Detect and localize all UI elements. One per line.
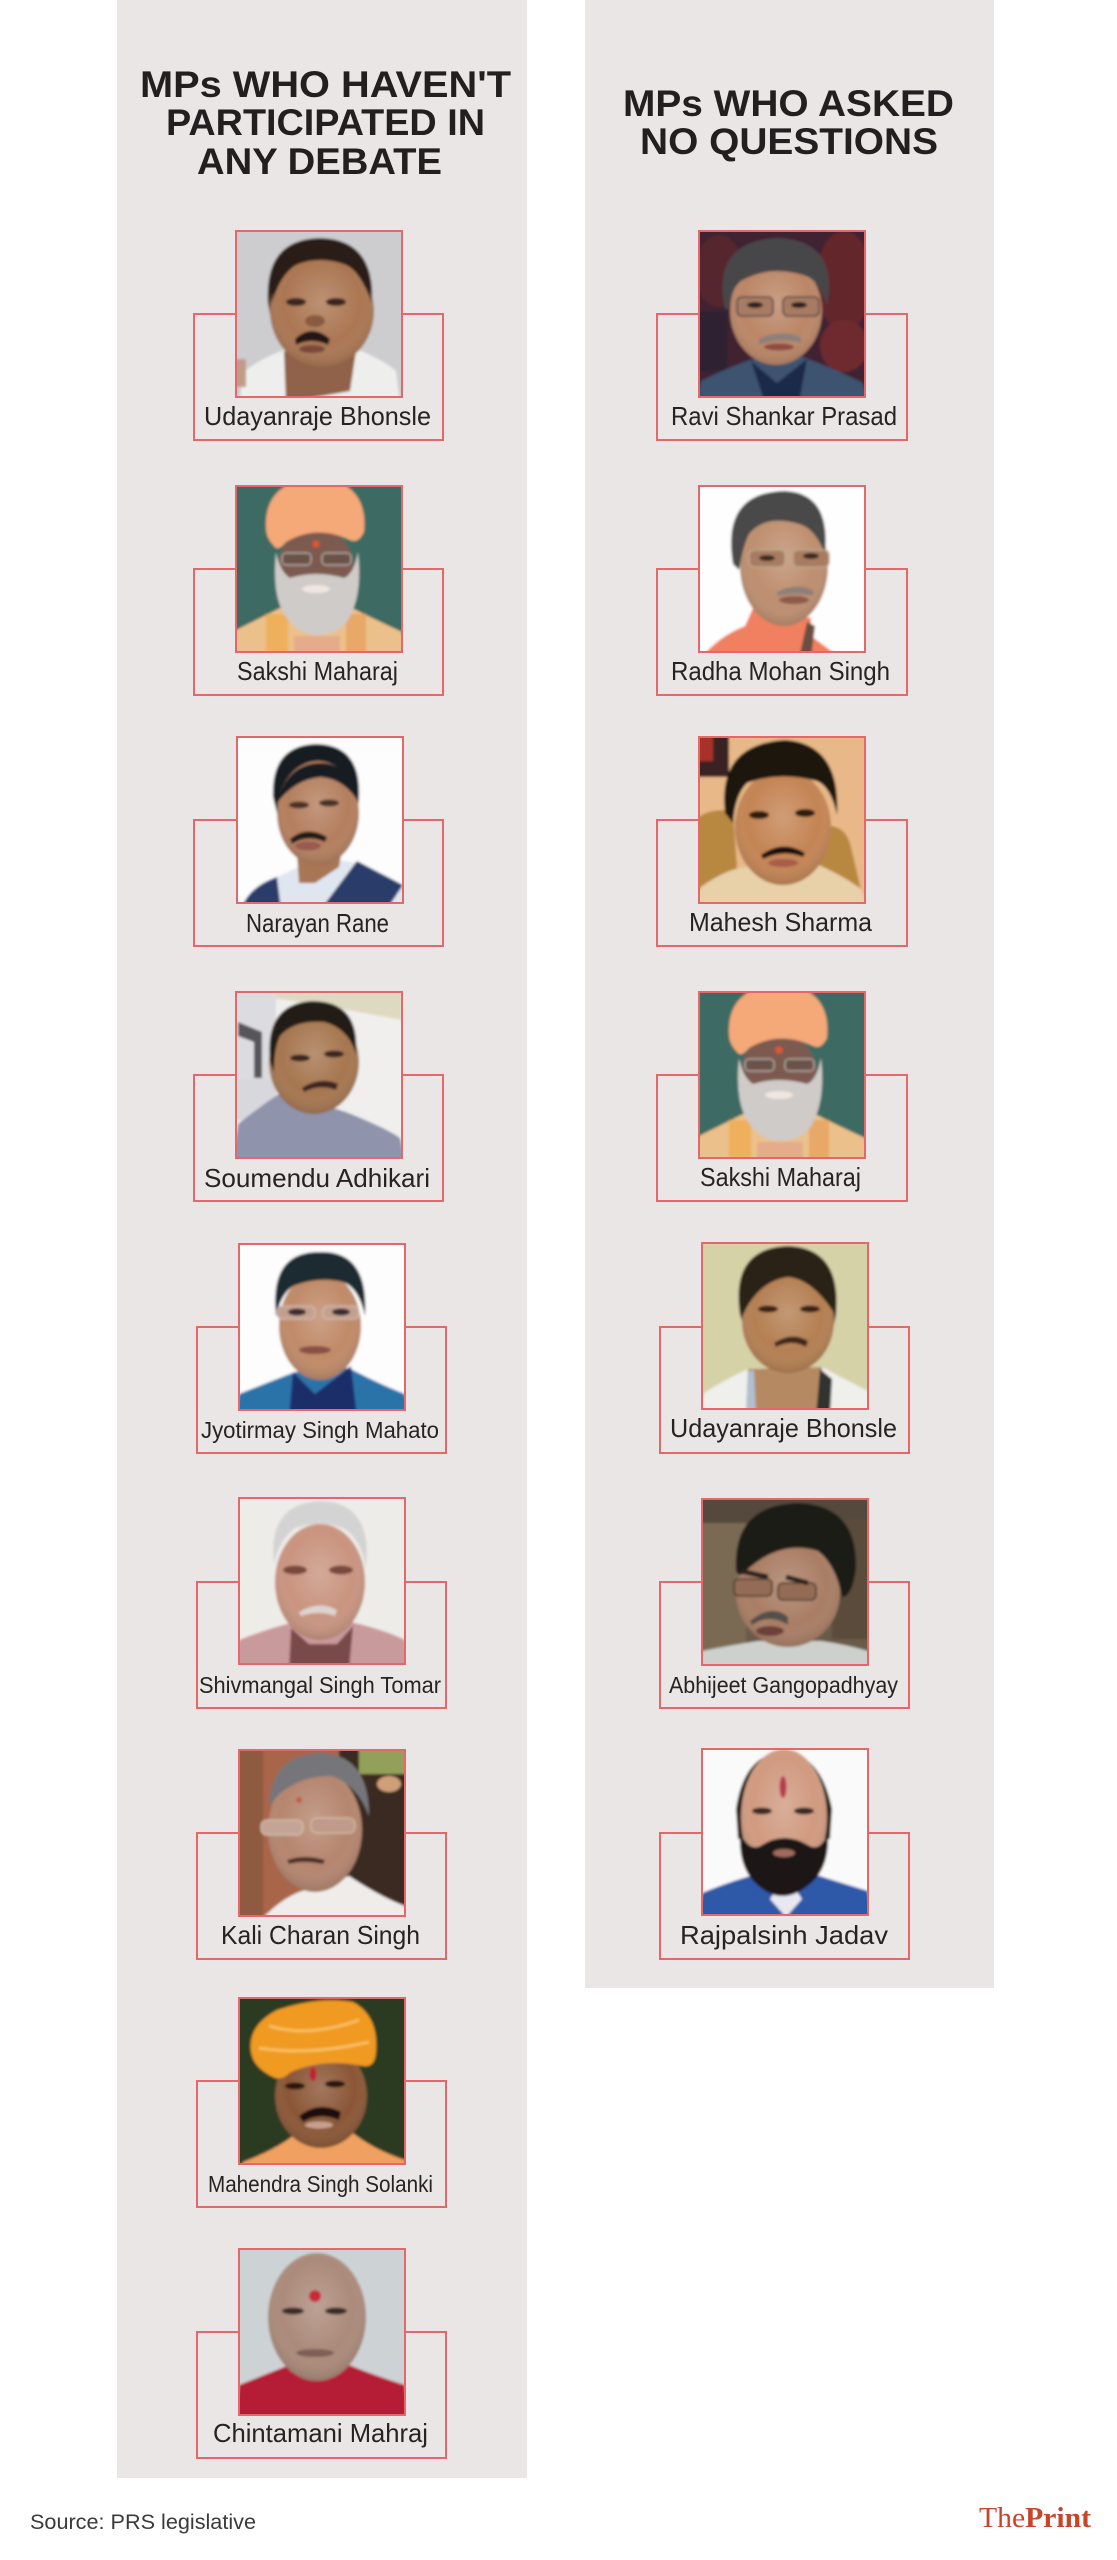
card: Ravi Shankar Prasad <box>657 225 907 440</box>
card: Abhijeet Gangopadhyay <box>660 1493 909 1708</box>
card: Udayanraje Bhonsle <box>194 225 443 440</box>
card: Mahesh Sharma <box>657 731 907 946</box>
photo: Kali Charan Singh <box>238 1749 406 1917</box>
name: Udayanraje Bhonsle <box>670 1413 897 1443</box>
card: Soumendu Adhikari <box>194 986 443 1201</box>
card: Kali Charan Singh <box>197 1744 446 1959</box>
photo: Narayan Rane <box>236 736 404 904</box>
photo: Chintamani Mahraj <box>238 2248 406 2416</box>
name: Chintamani Mahraj <box>213 2418 428 2448</box>
photo: Sakshi Maharaj (second list) <box>698 991 866 1159</box>
card: Sakshi Maharaj (second list) <box>657 986 907 1201</box>
heading: right column <box>623 83 954 162</box>
photo: Jyotirmay Singh Mahato <box>238 1243 406 1411</box>
photo: Abhijeet Gangopadhyay <box>701 1498 869 1666</box>
name: Radha Mohan Singh <box>671 656 890 686</box>
panel: MPs who asked no questions <box>585 0 994 1988</box>
card: Chintamani Mahraj <box>197 2243 446 2458</box>
name: Kali Charan Singh <box>221 1920 420 1950</box>
photo: Rajpalsinh Jadav <box>701 1748 869 1916</box>
photo: Mahesh Sharma <box>698 736 866 904</box>
card: Narayan Rane <box>194 731 443 946</box>
heading: left column: ANY DEBATE <box>197 141 442 182</box>
logo: ThePrint: ThePrint <box>979 2502 1091 2534</box>
photo: Ravi Shankar Prasad <box>698 230 866 398</box>
name: Ravi Shankar Prasad <box>671 401 897 431</box>
name: Abhijeet Gangopadhyay <box>669 1672 898 1698</box>
heading: left column <box>140 64 511 182</box>
panel: MPs who haven't participated in any debate <box>117 0 527 2478</box>
name: Soumendu Adhikari <box>204 1163 430 1193</box>
photo: Sakshi Maharaj <box>235 485 403 653</box>
card: Rajpalsinh Jadav <box>660 1743 909 1959</box>
photo: Udayanraje Bhonsle <box>235 230 403 398</box>
name: Mahesh Sharma <box>689 907 873 937</box>
photo: Soumendu Adhikari <box>235 991 403 1159</box>
card: Jyotirmay Singh Mahato <box>197 1238 446 1453</box>
heading: left column: PARTICIPATED IN <box>166 102 485 143</box>
card: Mahendra Singh Solanki <box>197 1992 446 2207</box>
heading: right column: MPs WHO ASKED <box>623 83 954 124</box>
heading: right column: NO QUESTIONS <box>640 121 938 162</box>
card: Shivmangal Singh Tomar <box>197 1492 446 1708</box>
card: Udayanraje Bhonsle (second list) <box>660 1237 909 1453</box>
name: Narayan Rane <box>246 908 389 938</box>
card: Sakshi Maharaj <box>194 480 443 695</box>
name: Sakshi Maharaj <box>700 1162 861 1192</box>
photo: Udayanraje Bhonsle (second list) <box>701 1242 869 1410</box>
card: Radha Mohan Singh <box>657 480 907 695</box>
name: Mahendra Singh Solanki <box>208 2171 433 2197</box>
photo: Shivmangal Singh Tomar <box>238 1497 406 1665</box>
name: Rajpalsinh Jadav <box>680 1920 888 1950</box>
name: Sakshi Maharaj <box>237 656 398 686</box>
name: Jyotirmay Singh Mahato <box>201 1417 439 1443</box>
source note: Source: PRS legislative <box>30 2511 256 2534</box>
heading: left column: MPs WHO HAVEN'T <box>140 64 511 105</box>
name: Udayanraje Bhonsle <box>204 401 431 431</box>
photo: Mahendra Singh Solanki <box>238 1997 406 2165</box>
photo: Radha Mohan Singh <box>698 485 866 653</box>
name: Shivmangal Singh Tomar <box>199 1672 441 1698</box>
